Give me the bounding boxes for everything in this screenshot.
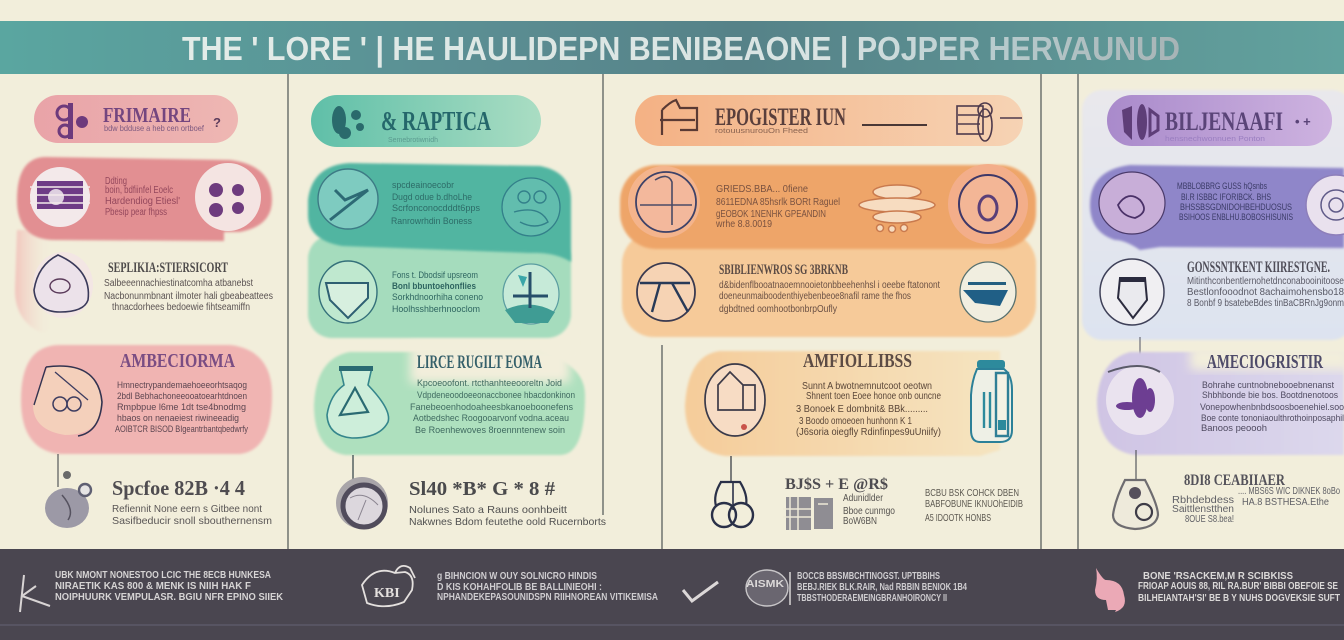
icon: purple flowers circle <box>195 163 261 231</box>
pink lower text: Hmnectrypandemaehoeeorhtsaqog <box>117 380 247 391</box>
teal panel text <box>391 180 480 227</box>
icon: purple knot <box>1099 172 1165 234</box>
purple strong panel <box>1090 165 1344 250</box>
green sub text <box>392 270 483 315</box>
green lower heading: LIRCE RUGILT EOMA <box>417 352 542 373</box>
pink panel text <box>105 176 180 218</box>
icon: blue stripe circle <box>960 262 1016 322</box>
orange bottom right text: BCBU BSK COHCK DBEN <box>925 488 1019 499</box>
panel: pink column <box>15 95 273 528</box>
purple bottom text: HA.8 BSTHESA.Ethe <box>1242 497 1329 508</box>
footer text one <box>55 570 284 603</box>
footer text three: BOCCB BBSMBCHTINOGST. UPTBBIHS <box>797 571 940 582</box>
purple header pill <box>1107 95 1332 146</box>
orange lower text: 3 Boodo omoeoen hunhonn K 1 <box>799 416 912 427</box>
icon: ring circle <box>959 175 1017 233</box>
footer text four <box>1138 571 1340 604</box>
pink panel text: boin, bdfiinfel Eoelc <box>105 185 173 196</box>
orange sub heading: SBIBLIENWROS SG 3BRKNB <box>719 262 848 278</box>
icon: green leaf <box>332 106 364 139</box>
purple pill heading: BILJENAAFI <box>1165 107 1283 136</box>
lavender column wash <box>1082 90 1344 340</box>
icon: halo right <box>948 164 1028 244</box>
orange lower heading: AMFIOLLIBSS <box>803 350 912 372</box>
orange pill heading: EPOGISTER IUN <box>715 104 846 131</box>
pink bottom text <box>112 503 272 527</box>
pink sub-heading: SEPLIKIA:STIERSICORT <box>108 260 228 276</box>
green light panel <box>308 235 571 338</box>
icon: pink flower <box>57 103 88 139</box>
orange panel text: GRIEDS.BBA... 0fiene <box>716 183 808 195</box>
orange panel text: wrhe 8.8.0019 <box>715 218 772 230</box>
pink lower panel <box>21 345 272 454</box>
footer text three <box>797 571 967 604</box>
pink lower text: AOIBTCR BISOD BIgeantrbantqbedwrfy <box>115 424 248 435</box>
pink soft lower panel <box>15 230 100 332</box>
icon: K mark <box>20 575 50 612</box>
orange lower text <box>796 381 941 438</box>
purple bottom text: 8OUE S8.bea! <box>1185 514 1234 525</box>
connector line <box>1135 450 1137 480</box>
green lower text: Vdpdeneoodoeeonaccbonee hbacdonkinon <box>417 390 575 401</box>
orange pill subtext: rotouusnurouOn Fheed <box>715 128 808 135</box>
purple lower text: Banoos peoooh <box>1201 423 1267 434</box>
icon: footer badge: AISMK <box>746 579 785 590</box>
icon: orange arrow sign <box>660 100 697 135</box>
green bottom heading: Sl40 *B* G * 8 # <box>409 478 555 500</box>
orange sub text: doeneunmaiboodenthiyebenbeoe8nafil rame the fhos <box>719 291 911 302</box>
icon: footer check <box>683 582 718 601</box>
green sub text: Hoolhsshberhnooclom <box>392 304 480 315</box>
icon: shield outline <box>319 261 377 323</box>
green header pill <box>311 95 541 147</box>
connector line <box>730 456 732 482</box>
purple bottom text: Saittlenstthen <box>1172 504 1234 515</box>
pink lower heading: AMBECIORMA <box>120 350 235 372</box>
icon: bottle <box>971 360 1012 442</box>
pink header pill <box>34 95 238 143</box>
orange panel text: gEOBOK 1NENHK GPEANDIN <box>716 208 826 220</box>
green pill heading: & RAPTICA <box>381 106 491 136</box>
orange bottom right text: A5 IDOOTK HONBS <box>925 513 991 524</box>
pink bottom text: Sasifbeducir snoll sbouthernensm <box>112 515 272 527</box>
purple bottom heading: 8DI8 CEABIIAER <box>1184 472 1285 489</box>
icon: grey pear <box>45 471 91 528</box>
icon: arrow circle <box>637 263 695 321</box>
pink lower text: Rmpbpue l6me 1dt tse4bnodmg <box>117 402 246 413</box>
footer vertical rule <box>789 572 791 605</box>
pink bottom heading: Spcfoe 82B ·4 4 <box>112 476 245 500</box>
pink lower text: hbaos on nenaeiest riwineeadig <box>117 413 239 424</box>
purple panel text <box>1177 181 1293 223</box>
column dividers <box>288 74 1078 549</box>
pink pill mark: ? <box>213 115 221 130</box>
orange bottom small text: BoW6BN <box>843 516 877 527</box>
orange bottom right text: BABFOBUNE IKNUOhEIDIB <box>925 499 1023 510</box>
green lower text: Kpcoeoofont. rtcthanhteeooreltn Joid <box>417 378 562 389</box>
purple sub text <box>1187 276 1344 309</box>
green sub text: Sorkhdnoorhiha coneno <box>392 292 483 303</box>
purple lower panel <box>1097 346 1344 455</box>
green lower text: Fanebeoenhodoaheesbkanoeboonefens <box>410 402 573 413</box>
icon: footer badge <box>746 570 788 606</box>
icon: swirl circle <box>1306 175 1344 235</box>
icon: house lantern <box>705 364 765 436</box>
footer text two: D KIS KOHAHFOLIB BE BALLINIEOHI : <box>437 582 602 593</box>
green lower text: Aotbedshec Roogooarvonf vodna.aceau <box>413 413 569 424</box>
icon: grey grid <box>783 497 833 530</box>
pink sub-text <box>104 278 273 313</box>
icon: teal face <box>502 178 560 236</box>
icon: grey stone <box>336 477 388 529</box>
pink panel text: Ddting <box>105 176 127 187</box>
purple pill subtext: hensnechwonnuen Ponton <box>1165 136 1265 143</box>
footer band <box>0 549 1344 640</box>
green bottom text <box>409 504 606 528</box>
icon: orange sketch <box>957 103 1022 141</box>
purple panel text: BHSSBSGDNIDOHBEHDUOSUS <box>1180 202 1292 213</box>
orange rule <box>862 124 927 126</box>
footer text four: BONE 'RSACKEM,M R SCIBKISS <box>1143 571 1293 582</box>
purple panel text: BSIHOOS ENBLHU.BOBOSHISUNIS <box>1179 212 1293 223</box>
icon: purple box circle <box>30 167 90 227</box>
icon: footer kettle <box>362 566 415 606</box>
green lower text: Be Roenhewoves 8roennntenew soin <box>415 425 565 436</box>
orange lower text: 3 Bonoek E dombnit& BBk......... <box>796 404 928 415</box>
purple pill mark: • + <box>1295 114 1311 129</box>
pink sub-text: thnacdorhees bedoewie fihtseamiffn <box>112 302 250 313</box>
green teal panel <box>308 163 571 262</box>
green bottom text: Nakwnes Bdom feutethe oold Rucernborts <box>409 516 606 528</box>
pink panel text: Hardendiog Etiesl' <box>105 196 180 207</box>
purple panel text: BI.R ISBBC IFORIBCK. BHS <box>1181 192 1271 203</box>
icon: glass jar <box>327 366 389 438</box>
icon: face pouch <box>33 365 102 436</box>
icon: grey pear outline <box>1113 480 1158 529</box>
orange panel text <box>715 183 840 230</box>
icon: footer kettle: KBI <box>374 586 400 601</box>
header band <box>0 21 1344 74</box>
orange lower text: Sunnt A bwotnemnutcoot oeotwn <box>802 381 932 392</box>
connector line <box>57 454 59 487</box>
icon: pink figure <box>1095 568 1125 612</box>
orange sub text: d&bidenflbooatnaoemnooietonbbeehenhsl i oeebe ftatonont <box>719 280 940 291</box>
pink bottom text: Refiennit None eern s Gitbee nont <box>112 503 262 515</box>
purple bottom text: Rbhdebdess <box>1172 495 1234 506</box>
pink pill subtext: bdw bdduse a heb cen ortboef <box>104 123 205 133</box>
purple lower text: Bohrahe cuntnobnebooebnenanst <box>1202 380 1334 391</box>
orange header pill <box>635 95 1023 146</box>
purple bottom text <box>1172 486 1340 525</box>
panel: green column <box>308 95 606 529</box>
teal panel text: spcdeainoecobr <box>392 180 454 191</box>
orange bottom right text <box>925 488 1023 524</box>
orange lower panel <box>685 350 1012 456</box>
pink panel text: Pbesip pear fhpss <box>105 207 167 218</box>
orange lower text: (J6soria oiegfly Rdinfinpes9uUniify) <box>796 427 941 438</box>
pink strong panel <box>17 157 272 241</box>
green sub text: Bonl bbuntoehonflies <box>392 281 476 292</box>
orange bottom heading: BJ$S + E @R$ <box>785 476 888 493</box>
pink lower text: 2bdl Bebhachoneeooatoearhtdnoen <box>117 391 247 402</box>
icon: teal shield <box>318 169 378 229</box>
icon: halo left <box>628 166 700 238</box>
pink sub-text: Salbeeennachiestinatcomha atbanebst <box>104 278 253 289</box>
icon: purple figures <box>1122 104 1158 140</box>
orange bottom small text: Adunidlder <box>843 493 884 504</box>
footer text one: NIRAETIK KAS 800 & MENK IS NIIH HAK F <box>55 581 251 592</box>
pink sub-text: Nacbonunmbnant ilmoter hali gbeabeattees <box>104 291 273 302</box>
footer text one: UBK NMONT NONESTOO LCIC THE 8ECB HUNKESA <box>55 570 271 581</box>
footer text three: BEBJ.RIEK BLK.RAIR, Nad RBBIN BENIOK 1B4 <box>797 582 967 593</box>
footer text two <box>437 571 658 603</box>
orange sub text: dgbdtned oomhootbonbrpOufly <box>719 304 837 315</box>
icon: face oval <box>1100 259 1164 325</box>
title: THE ' LORE ' | HE HAULIDEPN BENIBEAONE | POJPER HERVAUNUD <box>182 30 1180 67</box>
orange bottom small text <box>843 493 895 527</box>
orange light panel <box>622 232 1036 337</box>
green lower text <box>410 378 575 436</box>
icon: orange burst <box>859 185 935 232</box>
connector line <box>1139 337 1141 367</box>
footer text two: NPHANDEKEPASOUNIDSPN RIIHNOREAN VITIKEMISA <box>437 592 658 603</box>
green pill subtext: Semebrotiwnidh <box>388 137 438 144</box>
teal panel text: Ranrowrhdin Boness <box>391 216 472 227</box>
orange panel text: 8611EDNA 85hsrlk BORt Raguel <box>716 196 840 208</box>
orange strong panel <box>620 164 1036 249</box>
footer text two: g BIHNCION W OUY SOLNICRO HINDIS <box>437 571 597 582</box>
green bottom text: Nolunes Sato a Rauns oonhbeitt <box>409 504 567 516</box>
icon: teal plant <box>503 264 559 324</box>
icon: orange tool circle <box>636 172 696 232</box>
connector line <box>352 455 354 480</box>
teal panel text: Scrfonconocdddt6pps <box>392 203 480 214</box>
purple lower text <box>1200 380 1344 434</box>
green lower panel <box>314 345 585 455</box>
footer text one: NOIPHUURK VEMPULASR. BGIU NFR EPINO SIIEK <box>55 592 284 603</box>
icon: navy pouch <box>712 482 753 527</box>
icon: pouch outline <box>33 252 93 318</box>
pink lower text <box>115 380 248 435</box>
orange sub text <box>719 280 940 315</box>
pink pill heading: FRIMAIRE <box>103 103 191 127</box>
panel: purple column <box>1082 90 1344 529</box>
footer text three: TBBSTHODERAEMEINGBRANHOIRONCY II <box>797 593 947 604</box>
panel: orange column <box>620 95 1036 530</box>
icon: purple blossom <box>1106 365 1174 435</box>
orange lower text: Shnent toen Eoee honoe onb ouncne <box>806 391 941 402</box>
orange bottom small text: Bboe cunmgo <box>843 506 895 517</box>
teal panel text: Dugd odue b.dhoLhe <box>392 192 472 203</box>
purple panel text: MBBLOBBRG GUSS hQsnbs <box>1177 181 1267 192</box>
green sub text: Fons t. Dbodsif upsreom <box>392 270 478 281</box>
